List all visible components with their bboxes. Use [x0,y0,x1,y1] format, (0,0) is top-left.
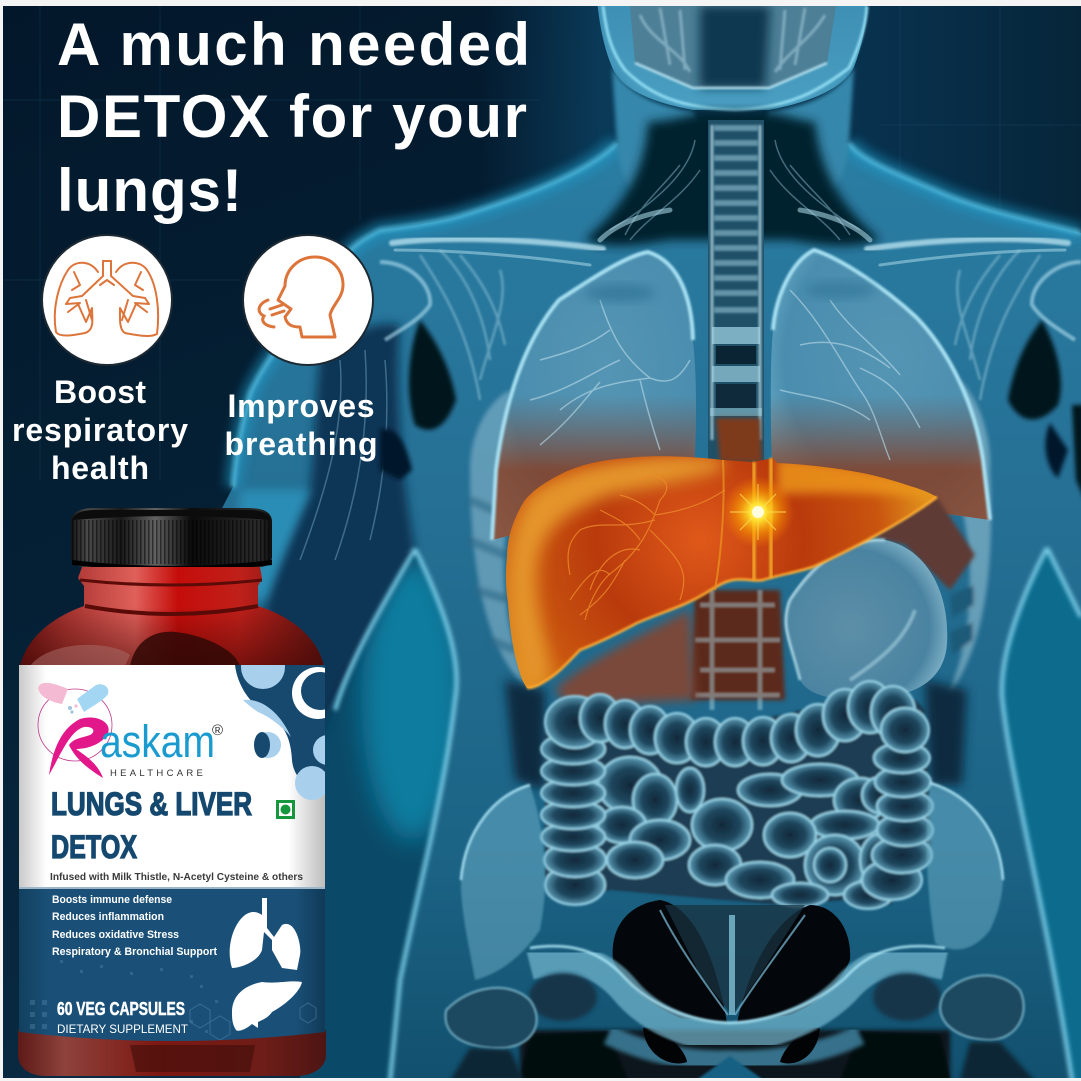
benefit list [52,894,217,958]
bottle neck and shoulder [20,567,324,666]
title: lungs! [57,157,242,224]
stomach [785,540,947,700]
benefit list: Boosts immune defense [52,894,172,906]
shoulders, arms and torso [190,143,1081,1081]
rib cage bands [468,380,991,700]
neck nerves [610,140,860,240]
label: Improves [228,388,374,424]
glowing liver [506,456,945,690]
chest streak lines [420,250,1040,400]
R mark [49,717,109,778]
transverse colon [545,681,929,766]
icon: head breathing [243,235,373,365]
product name: DETOX [51,829,138,865]
capsule halves [38,683,68,704]
product name [51,786,252,865]
head and jaw [597,0,867,110]
ascending colon [541,734,606,905]
hip knobs [445,988,537,1048]
product label [19,665,325,1041]
right lung [771,250,990,520]
icon: lungs [42,235,172,365]
bottle base [18,1030,326,1076]
tagline: HEALTHCARE [110,768,206,779]
pelvic bones [445,783,1035,1081]
liver sparkle [722,476,794,548]
label blob pattern [235,665,325,800]
dark brown band right of the liver [873,497,975,590]
label [12,374,188,486]
brand logo [38,683,223,779]
label: breathing [224,426,378,462]
benefit: boost respiratory health [12,235,188,486]
veg mark [276,800,295,819]
intestines [541,681,933,909]
descending colon [844,743,933,909]
benefit: improves breathing [224,235,378,462]
dietary supplement: DIETARY SUPPLEMENT [57,1022,189,1036]
small intestine [598,757,900,907]
lower pelvis [520,1030,950,1081]
title [57,11,530,224]
spine [690,120,785,710]
registered mark: ® [212,722,223,739]
teal gap left of torso [300,549,457,1081]
dark flanks beside the intestines [505,680,967,790]
title: A much needed [57,11,530,78]
liver highlight band [508,456,945,690]
icon: white liver [232,981,302,1031]
dark armpits [409,320,456,430]
capsule count: 60 VEG CAPSULES [57,999,185,1019]
benefit list: Reduces oxidative Stress [52,929,179,941]
benefit list: Respiratory & Bronchial Support [52,946,217,958]
label: respiratory [12,412,188,448]
brand name: askam [100,716,215,767]
left lung [492,252,696,540]
iliac wings [461,785,545,980]
bottle cap [71,508,272,570]
dark arm interior [265,324,415,740]
icon: white lungs [230,898,300,970]
dark neck interior [585,112,880,246]
shoulder joints [380,262,1081,340]
product name: LUNGS & LIVER [51,786,252,822]
ingredients line: Infused with Milk Thistle, N-Acetyl Cysteine & others [50,871,303,883]
bright arm band [235,490,310,600]
label [224,388,378,462]
dot texture [30,960,218,1033]
title: DETOX for your [57,83,527,150]
teal gap right of torso [1002,548,1081,1081]
benefit list: Reduces inflammation [52,911,164,923]
body rim glow [233,143,1081,1081]
label: Boost [54,374,146,410]
brown space under the liver [555,610,695,705]
pubic arch [530,960,945,1037]
collar bones [392,210,1068,265]
arm streak lines [300,350,387,560]
neck sides [612,67,700,194]
label: health [51,450,149,486]
supplement bottle [18,508,344,1076]
